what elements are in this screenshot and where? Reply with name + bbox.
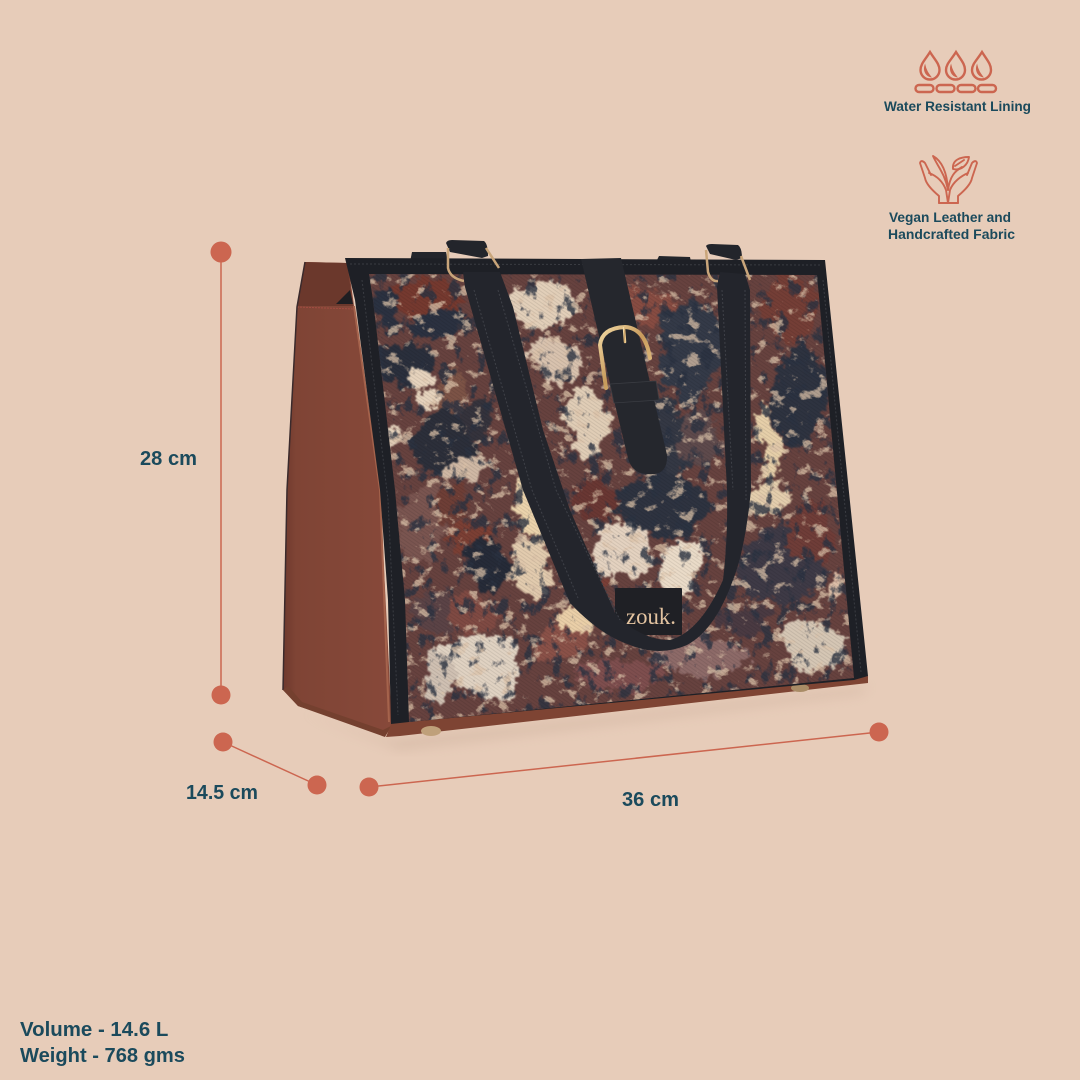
shoulder strap <box>463 272 751 651</box>
strap stitching <box>474 290 746 620</box>
dark and maroon masses <box>385 278 465 318</box>
label: vegan leather and handcrafted fabric: Vegan Leather and <box>889 210 1011 225</box>
side gusset <box>283 262 392 737</box>
left hardware tab and ring <box>446 240 499 281</box>
volume and weight specs: Volume - 14.6 L <box>20 1019 168 1041</box>
cream streaks <box>515 281 575 329</box>
height dimension: 28 cm <box>140 242 232 704</box>
height dimension: 28 cm: 28 cm <box>140 448 197 470</box>
front panel black binding <box>345 258 868 724</box>
right hardware tab and ring <box>706 244 750 281</box>
turbulence flecks <box>360 265 865 730</box>
depth dimension: 14.5 cm <box>186 732 326 804</box>
depth dimension: 14.5 cm: 14.5 cm <box>186 782 258 804</box>
gold buckle <box>600 327 650 388</box>
label: water resistant lining: Water Resistant Lining <box>884 99 1031 114</box>
buckle keeper <box>610 381 659 403</box>
handbag illustration <box>283 240 870 750</box>
width dimension: 36 cm <box>360 722 888 811</box>
base strip and feet <box>386 676 868 737</box>
ground shadow <box>300 686 870 750</box>
front panel stitching <box>350 264 861 715</box>
label: vegan leather and handcrafted fabric: Handcrafted Fabric <box>888 227 1016 242</box>
width dimension: 36 cm: 36 cm <box>622 789 679 811</box>
icon: hands holding leaf <box>920 156 977 203</box>
icon: water resistant drops <box>916 52 996 92</box>
back strap tabs <box>410 252 691 262</box>
volume and weight specs: Weight - 768 gms <box>20 1045 185 1067</box>
brand label <box>615 588 682 635</box>
brand label: zouk. <box>626 604 676 629</box>
buckle tab <box>581 258 667 474</box>
marbled fabric <box>360 265 865 730</box>
